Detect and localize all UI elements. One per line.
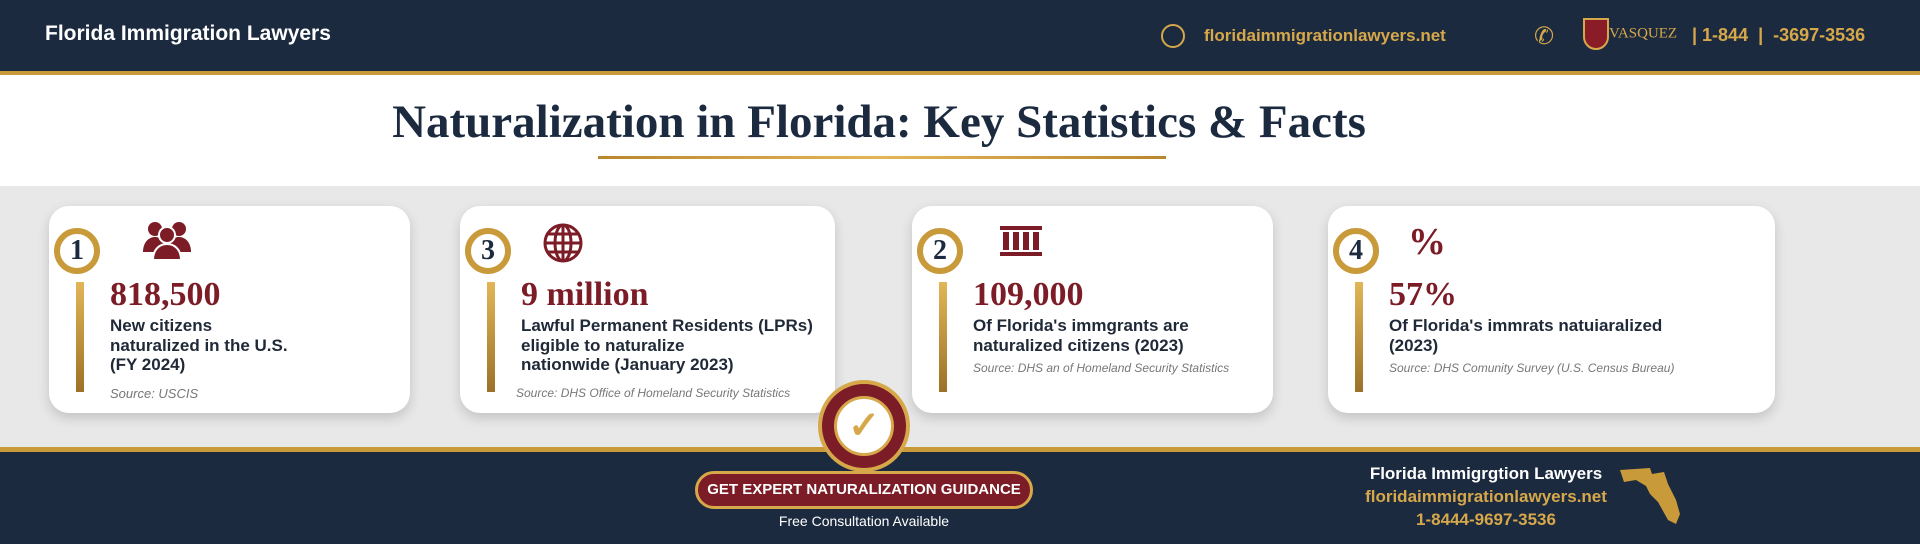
card 1: (FY 2024)	[110, 355, 185, 374]
header brand: Florida Immigration Lawyers	[45, 22, 331, 45]
icon: phone: ✆	[1534, 23, 1554, 50]
card 2: 3	[481, 235, 495, 266]
card 1: Source: USCIS	[110, 386, 198, 401]
icon: percent: %	[1408, 221, 1446, 263]
icon: building	[1000, 226, 1042, 256]
badge: checkmark: ✓	[848, 405, 880, 447]
title band	[0, 75, 1920, 186]
card 3: Source: DHS an of Homeland Security Statistics	[973, 361, 1229, 375]
stat: 9 million	[521, 276, 649, 313]
footer contact: Florida Immigrgtion Lawyers	[1370, 464, 1602, 483]
footer contact: floridaimmigrationlawyers.net	[1365, 487, 1607, 506]
footer	[0, 452, 1920, 544]
stat: 109,000	[973, 276, 1084, 313]
icon: people	[143, 222, 191, 259]
card 3	[912, 206, 1273, 413]
card 1	[49, 206, 410, 413]
logo: vasquez: VASQUEZ	[1609, 25, 1677, 41]
footer contact	[1365, 464, 1607, 529]
footer contact: 1-8444-9697-3536	[1416, 510, 1556, 529]
button: guidance	[695, 471, 1033, 509]
logo: vasquez	[1583, 18, 1677, 50]
card 2: Source: DHS Office of Homeland Security Statistics	[516, 386, 790, 400]
card 1: 1	[70, 235, 84, 266]
card 1: naturalized in the U.S.	[110, 336, 288, 354]
card 2: eligible to naturalize	[521, 336, 684, 354]
card 4: Of Florida's immrats natuiaralized	[1389, 316, 1662, 335]
stat: 818,500	[110, 276, 220, 313]
badge: checkmark	[818, 380, 910, 472]
card 4: 4	[1349, 235, 1363, 266]
card 2: Lawful Permanent Residents (LPRs)	[521, 316, 813, 335]
card 2	[460, 206, 835, 413]
icon: globe	[1161, 24, 1185, 48]
title: Naturalization in Florida: Key Statistics & Facts	[392, 96, 1366, 148]
header phone: | 1-844 | -3697-3536	[1692, 25, 1865, 45]
card 1: New citizens	[110, 316, 212, 335]
header bar	[0, 0, 1920, 71]
card 3: 2	[933, 235, 947, 266]
header website: floridaimmigrationlawyers.net	[1204, 26, 1446, 45]
card 2: nationwide (January 2023)	[521, 355, 734, 374]
stat: 57%	[1389, 276, 1457, 313]
card 3: naturalized citizens (2023)	[973, 336, 1184, 354]
free consultation: Free Consultation Available	[779, 513, 949, 529]
card 4: (2023)	[1389, 336, 1438, 354]
card 3: Of Florida's immgrants are	[973, 316, 1189, 335]
button: guidance: GET EXPERT NATURALIZATION GUIDANCE	[707, 481, 1021, 498]
card 4	[1328, 206, 1775, 413]
icon: florida map	[1620, 468, 1680, 524]
icon: globe	[544, 224, 582, 262]
card 4: Source: DHS Comunity Survey (U.S. Census Bureau)	[1389, 361, 1674, 375]
